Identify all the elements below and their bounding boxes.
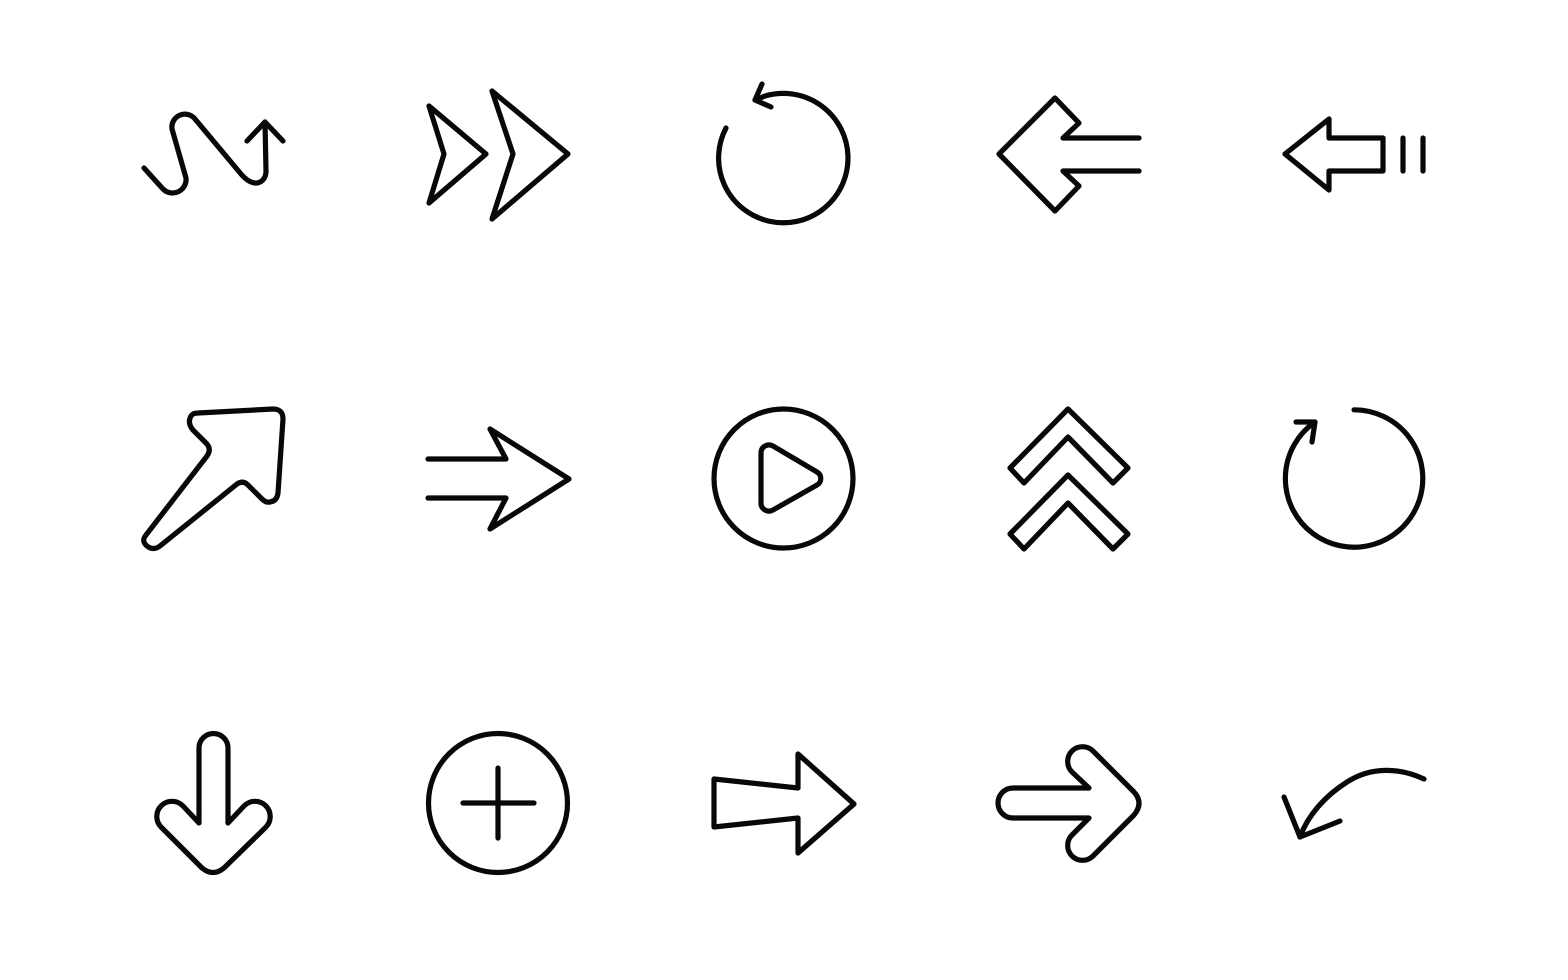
icon: clockwise circular arrow (1285, 410, 1423, 547)
icon: plus in circle (428, 734, 568, 872)
icon: tapered right arrow (714, 754, 854, 853)
icon: double triangle fast forward (429, 91, 568, 219)
icon: left arrow with pause bars (1285, 119, 1423, 190)
icon: zigzag arrow up (144, 114, 283, 193)
icon: rounded right arrow (998, 747, 1139, 860)
icon: double chevron up (1010, 409, 1128, 549)
icon: double line right arrow (428, 429, 569, 529)
icon: rounded diagonal arrow up-right (144, 409, 283, 548)
icon: rounded down arrow (157, 734, 270, 872)
icon: wide left arrow with open tail (999, 98, 1139, 211)
icon: play button in circle (714, 409, 853, 548)
icon: curved arrow down-left (1284, 770, 1424, 837)
icon: counter-clockwise circular arrow (719, 84, 848, 223)
